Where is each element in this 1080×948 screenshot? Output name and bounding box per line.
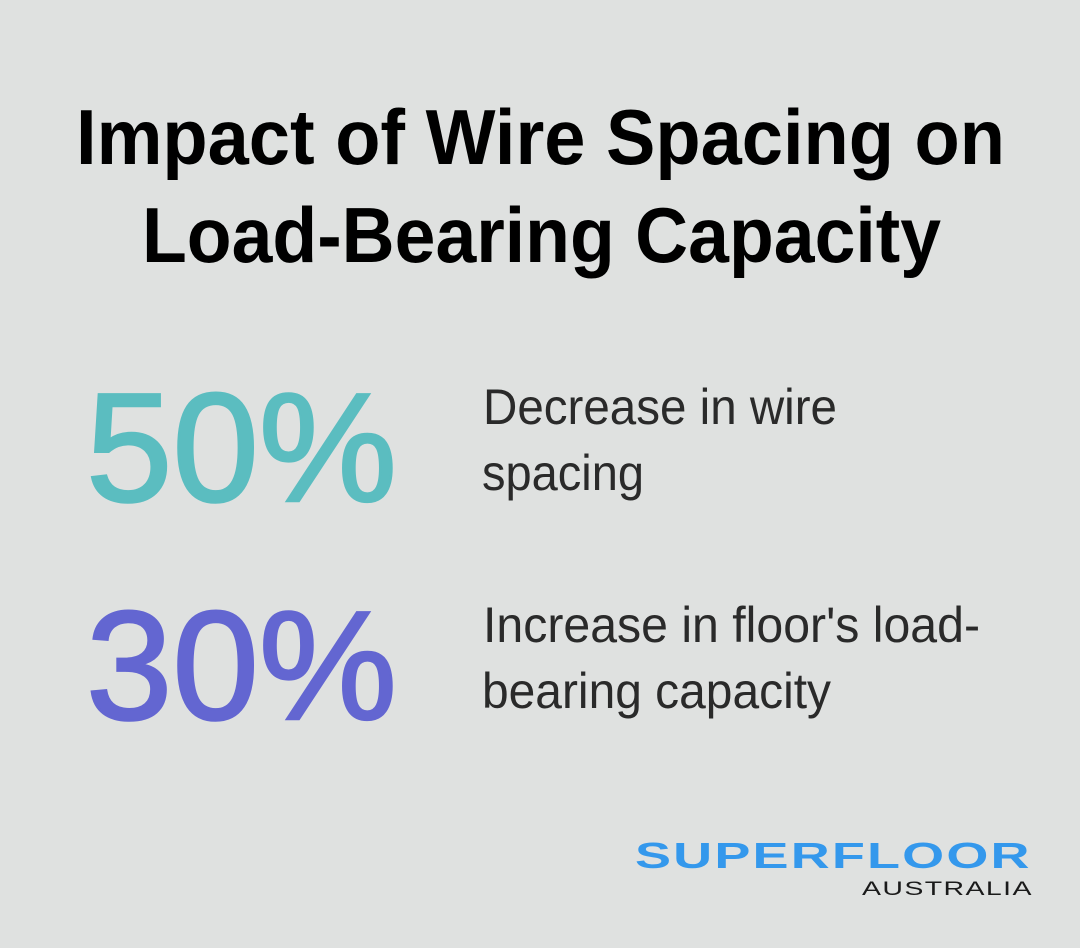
stat value: 30%: 30% (86, 579, 397, 752)
stat description: wire spacing (482, 379, 837, 501)
stat description: wire spacing: spacing (482, 445, 644, 501)
stat description: load-bearing capacity: Increase in floor's load- (483, 597, 980, 653)
title: Impact of Wire Spacing on (76, 93, 1005, 181)
stat description: wire spacing: Decrease in wire (483, 379, 837, 435)
title (76, 93, 1005, 279)
stat description: load-bearing capacity: bearing capacity (482, 663, 831, 719)
stat description: load-bearing capacity (482, 597, 980, 719)
logo: Superfloor Australia (635, 835, 1032, 900)
stat: 50% decrease in wire spacing (86, 361, 837, 534)
stat: 30% increase in load-bearing capacity (86, 579, 980, 752)
title: Load-Bearing Capacity (142, 191, 941, 279)
logo: Superfloor Australia: SUPERFLOOR (635, 835, 1030, 876)
logo: Superfloor Australia: AUSTRALIA (862, 879, 1032, 900)
stat value: 50%: 50% (86, 361, 397, 534)
